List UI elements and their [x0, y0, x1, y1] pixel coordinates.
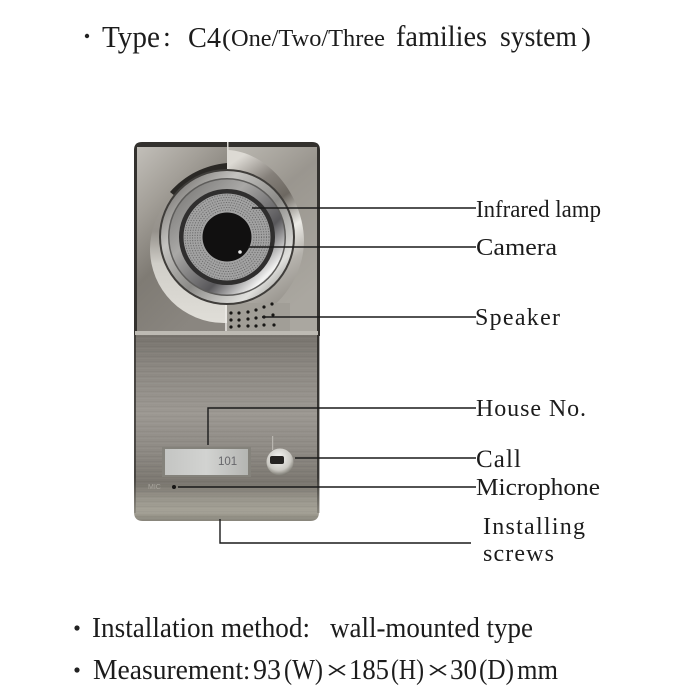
spec: measurement — [74, 655, 558, 686]
label: installing screws: screws — [483, 541, 554, 567]
spec: measurement: 185 — [349, 655, 389, 686]
title: type: families — [396, 20, 487, 53]
label: call: Call — [476, 446, 521, 473]
spec: installation method — [74, 613, 533, 644]
spec: measurement: (H) — [391, 655, 424, 686]
spec: measurement: (D) — [479, 655, 514, 686]
title: type: : — [163, 22, 171, 53]
microphone hole — [148, 484, 176, 491]
title: type: ) — [581, 23, 591, 52]
title: type: ( — [222, 26, 231, 52]
label: speaker: Speaker — [475, 305, 560, 331]
label: camera: Camera — [476, 235, 557, 261]
label: house no: House No. — [476, 396, 586, 422]
label: installing screws: Installing — [483, 514, 585, 540]
spec: measurement: mm — [517, 655, 558, 686]
title: type: system — [500, 20, 577, 53]
speaker grille — [226, 302, 290, 332]
label: infrared lamp: Infrared lamp — [476, 197, 601, 223]
title: type — [85, 19, 591, 54]
spec: installation method: Installation method: — [92, 613, 310, 644]
label: microphone: Microphone — [476, 475, 600, 501]
title: type: C4 — [188, 22, 221, 54]
spec: measurement: × — [426, 656, 450, 685]
microphone hole: MIC — [148, 484, 161, 491]
spec: measurement: 30 — [450, 655, 477, 686]
house number plate — [162, 447, 251, 477]
spec: measurement: × — [325, 656, 349, 685]
camera lens assembly — [159, 169, 295, 305]
device: door intercom panel — [134, 142, 320, 521]
spec: measurement: Measurement — [93, 655, 243, 686]
house number plate: 101 — [218, 456, 237, 468]
spec: measurement: (W) — [284, 655, 323, 686]
title: type: One/Two/Three — [231, 26, 385, 52]
spec: measurement: : — [243, 656, 250, 685]
call button — [266, 436, 294, 476]
spec: installation method: wall-mounted type — [330, 613, 533, 644]
spec: measurement: 93 — [253, 655, 281, 686]
title: type: Type — [102, 19, 160, 54]
upper faceplate — [137, 142, 317, 332]
device body — [134, 142, 320, 336]
callout lines — [178, 208, 476, 543]
label: installing screws — [483, 514, 585, 567]
seam and lower faceplate — [134, 331, 319, 521]
